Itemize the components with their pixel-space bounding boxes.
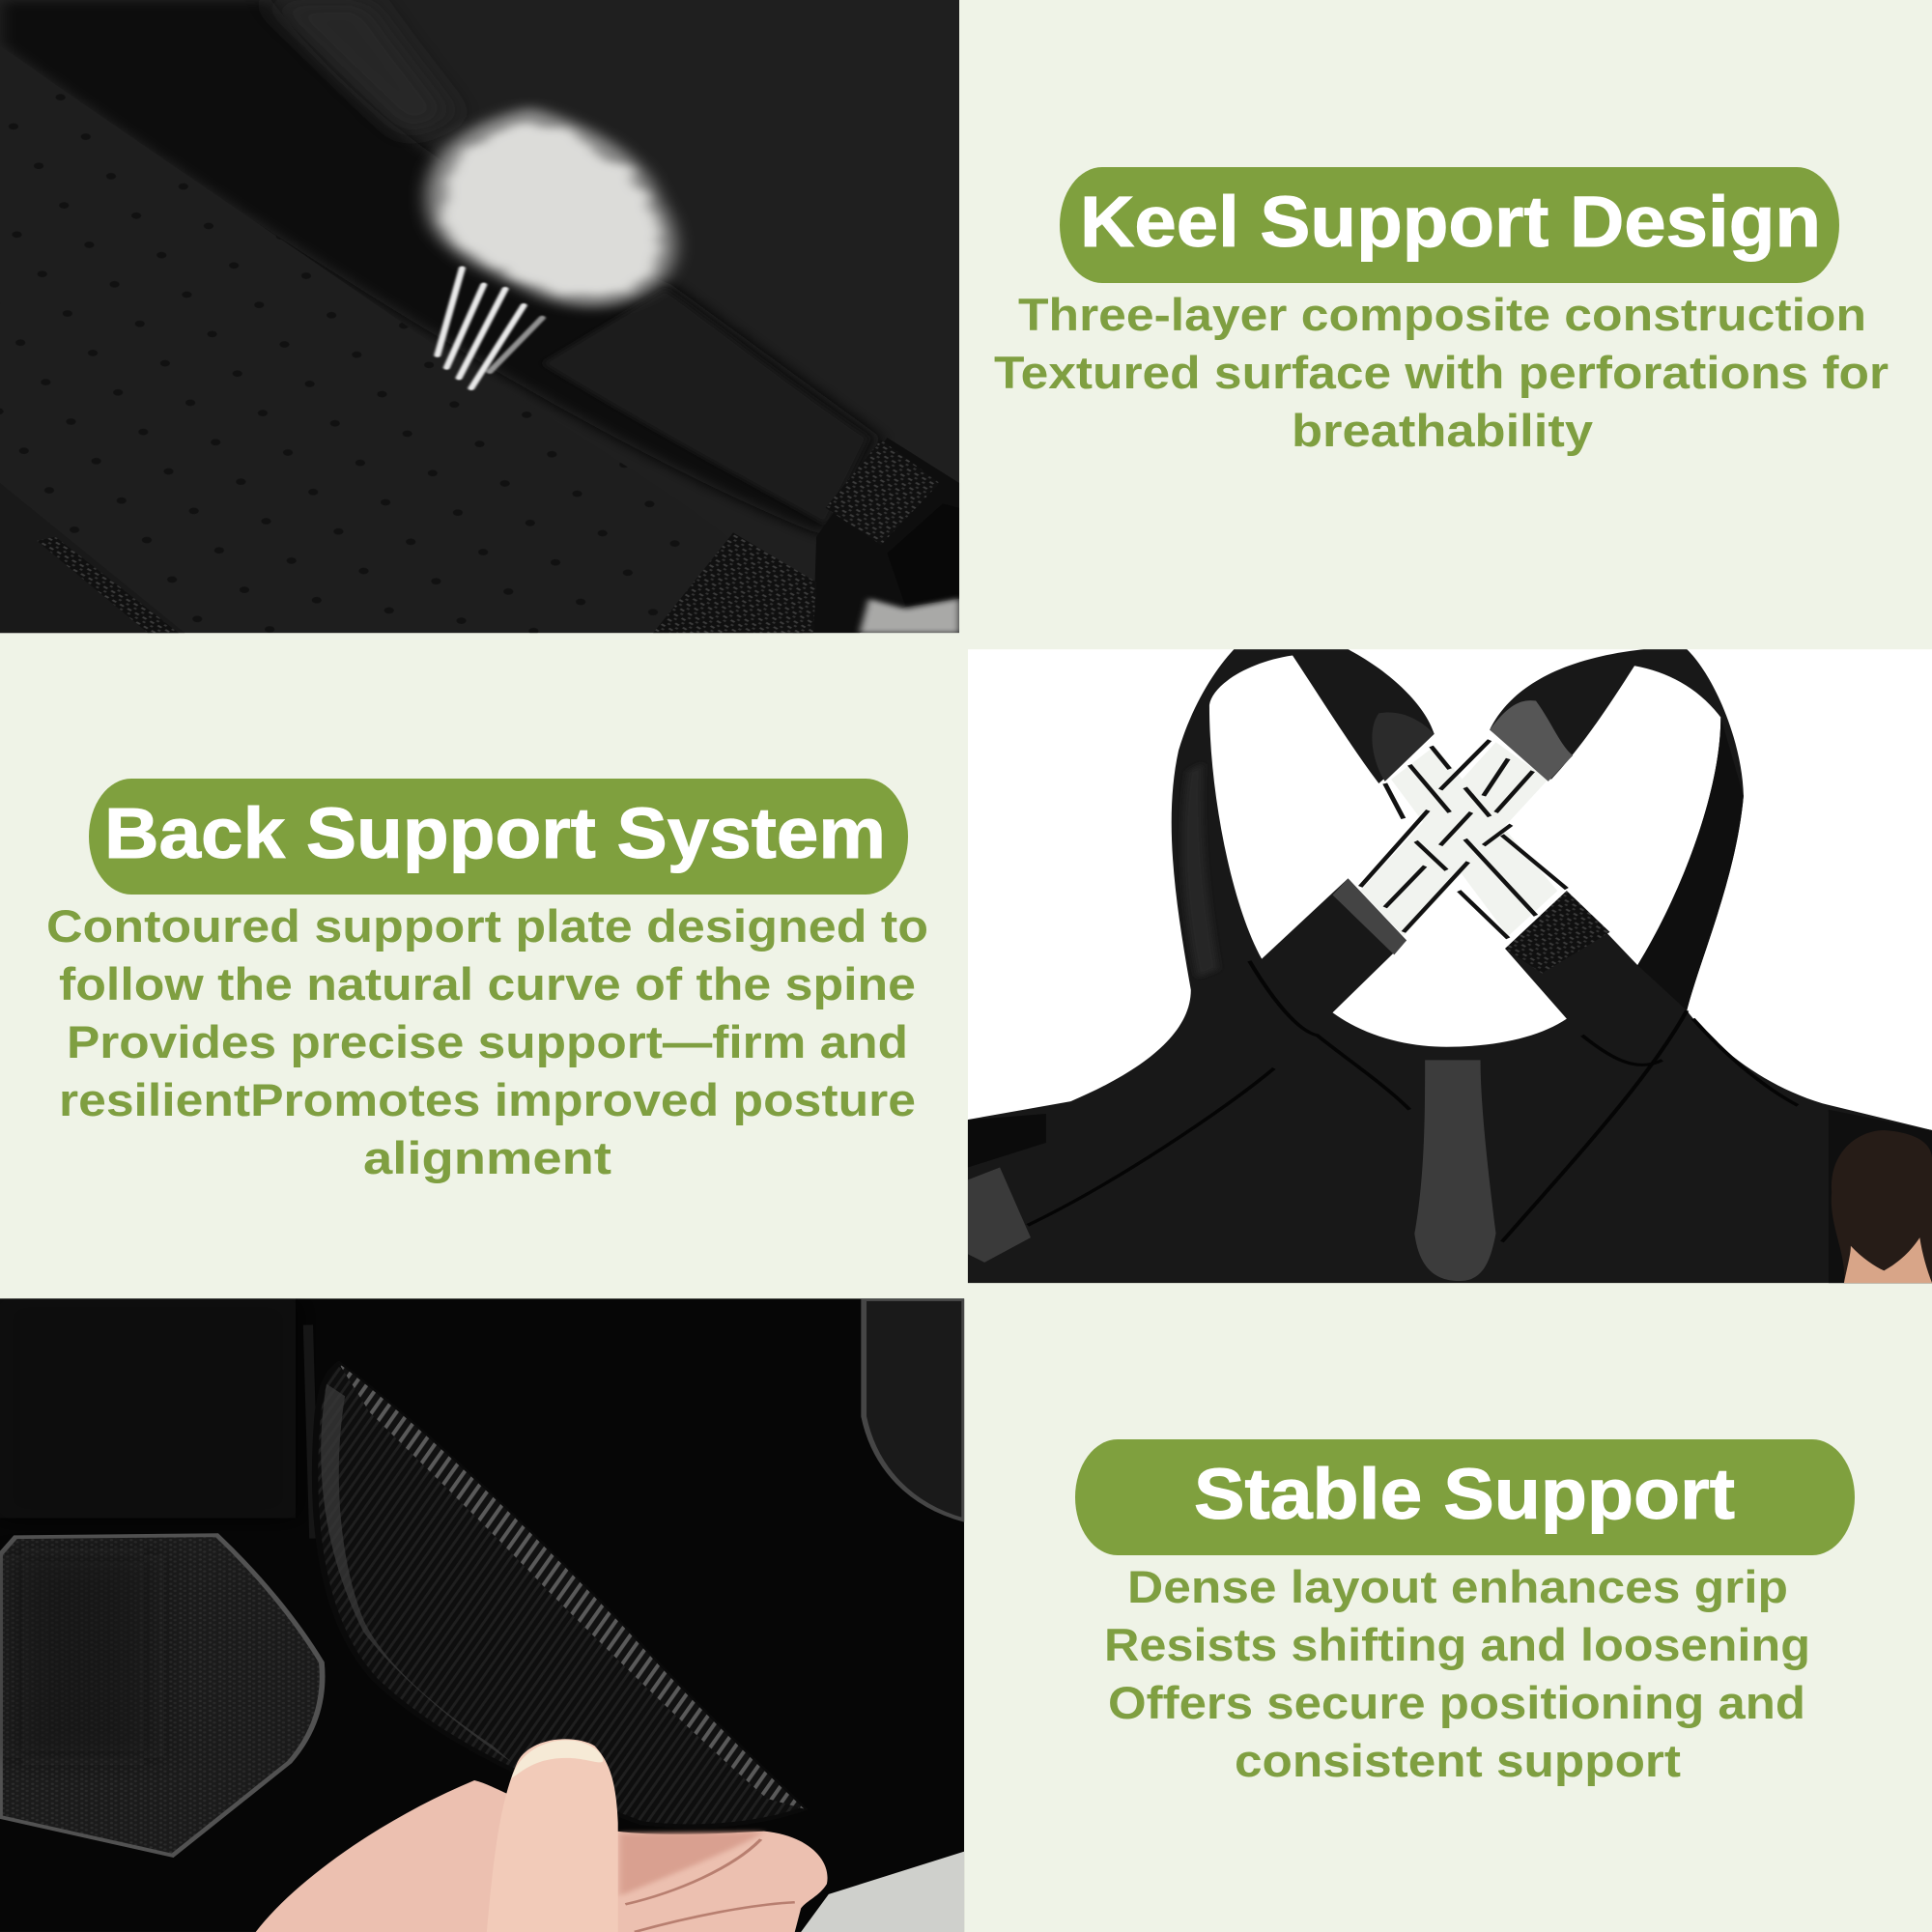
grey shoulder pads [1490,700,1573,781]
textured perforated panel [0,45,816,633]
text block: back support details: alignment [363,1132,611,1183]
seams [1028,961,1798,1241]
heading pill: Keel Support Design [1060,167,1839,283]
vest silhouette [966,649,1932,1283]
text block: stable support details: Offers secure positioning and [1108,1677,1805,1728]
heading pill: Keel Support Design: Keel Support Design [1080,182,1821,262]
flap with ribbed texture [315,1364,804,1827]
seam [308,1325,314,1539]
left pebbled pad [0,1535,323,1856]
text block: keel support details: breathability [1292,405,1593,456]
hand [256,1739,828,1932]
photo: back brace vest with crossed elastic straps [966,649,1932,1283]
text block: stable support details [1104,1561,1810,1786]
heading pill: Stable Support: Stable Support [1194,1454,1735,1534]
top-right pad [864,1299,964,1520]
text block: keel support details: Three-layer composite construction [1018,289,1866,340]
heading pill: Back Support System [89,779,908,895]
dark valley and tube [0,0,881,537]
head of wearer [1832,1130,1932,1283]
text block: back support details: follow the natural curve of the spine [59,958,916,1009]
text block: back support details: Provides precise support—firm and [67,1016,908,1067]
photo: hook-and-loop panel held by fingers [0,1298,964,1932]
text block: back support details: resilientPromotes improved posture [59,1074,916,1125]
text block: stable support details: Resists shifting and loosening [1104,1619,1810,1670]
text block: back support details: Contoured support plate designed to [46,900,928,952]
text block: back support details [46,900,928,1183]
cotton puff [426,107,676,307]
light surface at corner [801,1852,964,1932]
keel plate [1414,1060,1496,1281]
spring wires [438,269,542,388]
strap end bands [1332,878,1406,954]
text block: stable support details: Dense layout enhances grip [1127,1561,1788,1612]
text block: keel support details [994,289,1889,456]
text block: stable support details: consistent support [1235,1735,1681,1786]
strap shading [1182,763,1218,978]
dark fold behind hems [813,438,959,633]
heading pill: Back Support System: Back Support System [104,793,886,873]
crossed elastic [1360,740,1567,938]
stitched hems [653,532,816,633]
text block: keel support details: Textured surface with perforations for [994,347,1889,398]
heading pill: Stable Support [1075,1439,1855,1555]
photo: fabric with cotton and wires [0,0,959,633]
side tab [968,1168,1031,1263]
